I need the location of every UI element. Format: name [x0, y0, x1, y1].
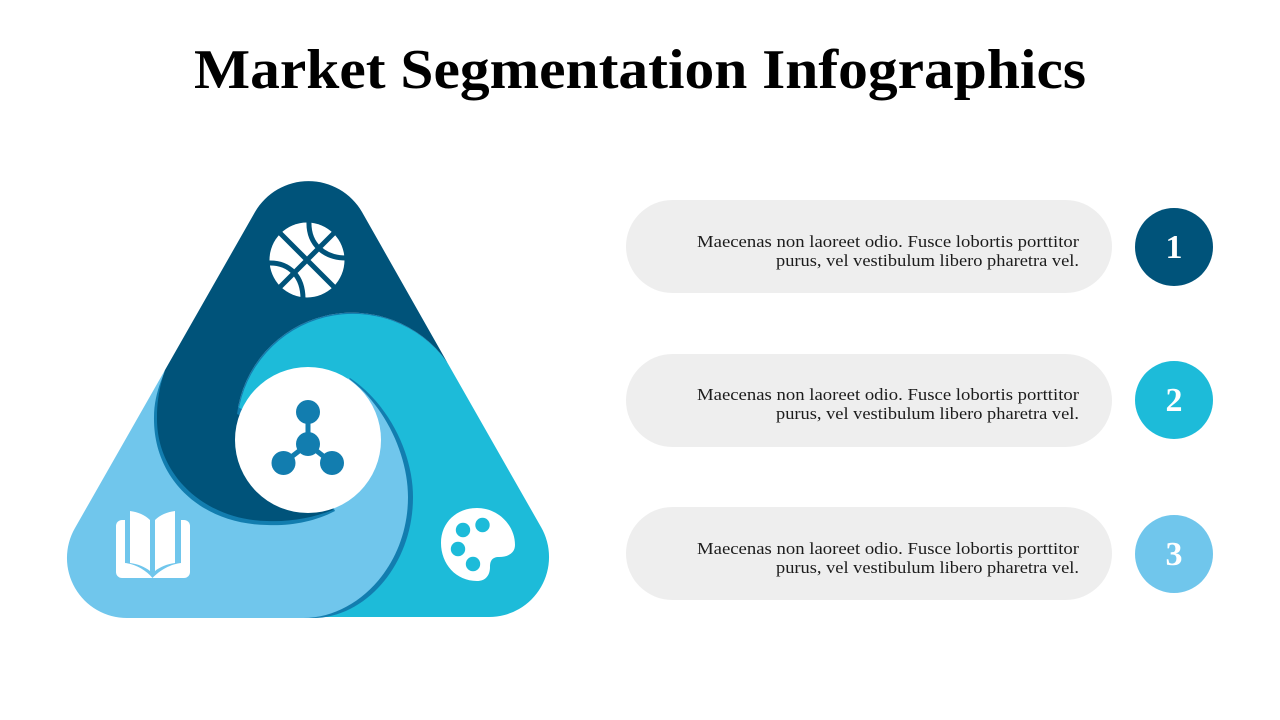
icon: basketball [268, 221, 346, 299]
segment: cyan shadow edge [237, 313, 447, 440]
text 2 [697, 385, 1079, 423]
text 1: purus, vel vestibulum libero pharetra vel. [776, 251, 1079, 270]
segment: cyan [238, 314, 549, 617]
icon: paint palette [441, 508, 515, 581]
text 3: Maecenas non laoreet odio. Fusce lobortis porttitor [697, 539, 1079, 558]
segment: dark blue [157, 181, 447, 521]
center white circle [235, 367, 381, 513]
pill 2 [626, 354, 1112, 447]
row 2 [626, 354, 1213, 447]
row 3 [626, 507, 1213, 600]
title: Market Segmentation Infographics [194, 39, 1086, 101]
text 3: purus, vel vestibulum libero pharetra vel. [776, 558, 1079, 577]
text 3 [697, 539, 1079, 577]
icon: open book [116, 511, 190, 578]
icon: molecule [272, 400, 344, 475]
number badge 1 [1135, 208, 1213, 286]
segment: light blue shadow edge [300, 378, 413, 618]
text 1 [697, 232, 1079, 270]
number badge 2 [1135, 361, 1213, 439]
pill 3 [626, 507, 1112, 600]
number badge 3: 3 [1166, 536, 1182, 573]
text 1: Maecenas non laoreet odio. Fusce lobortis porttitor [697, 232, 1079, 251]
pill 1 [626, 200, 1112, 293]
segment: light blue [67, 370, 408, 618]
text 2: purus, vel vestibulum libero pharetra vel. [776, 404, 1079, 423]
number badge 3 [1135, 515, 1213, 593]
row 1 [626, 200, 1213, 293]
number badge 1: 1 [1166, 229, 1182, 266]
number badge 2: 2 [1166, 382, 1182, 419]
segment: dark blue shadow edge [154, 369, 335, 525]
text 2: Maecenas non laoreet odio. Fusce lobortis porttitor [697, 385, 1079, 404]
triangle swirl diagram [67, 181, 549, 618]
